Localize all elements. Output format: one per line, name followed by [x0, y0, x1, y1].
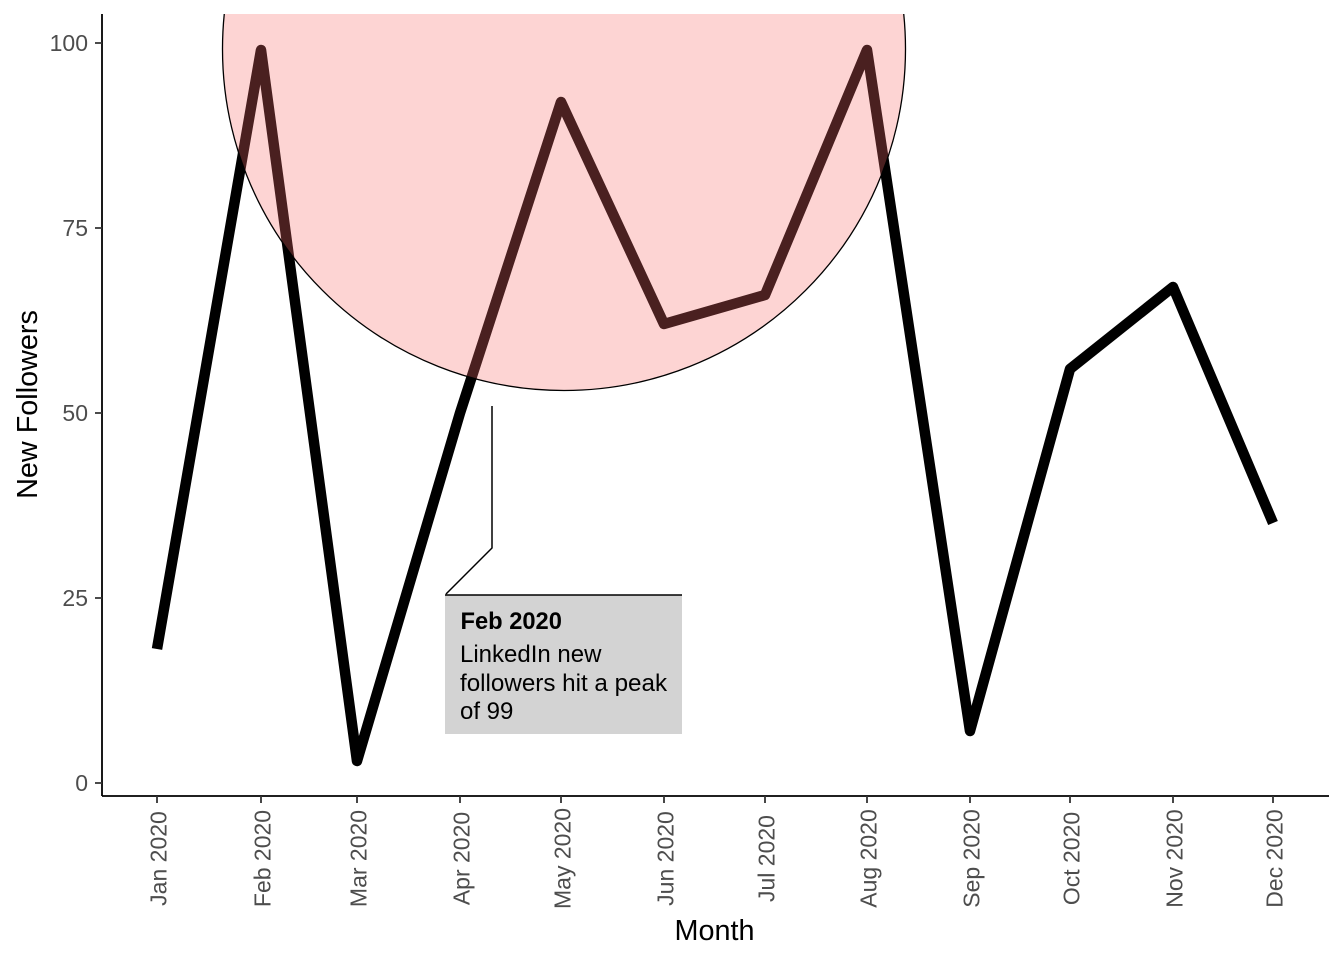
x axis: Jul 2020 — [754, 815, 780, 902]
x axis: Mar 2020 — [346, 810, 372, 907]
x axis: Dec 2020 — [1262, 809, 1288, 908]
callout: Feb 2020 peak: Feb 2020 — [460, 609, 562, 635]
y axis: 75 — [62, 215, 88, 241]
y axis: 50 — [62, 400, 88, 426]
y axis — [50, 14, 102, 796]
callout: Feb 2020 peak: followers hit a peak — [460, 670, 668, 697]
x axis: Nov 2020 — [1162, 809, 1188, 908]
x axis: Feb 2020 — [250, 810, 276, 907]
callout: Feb 2020 peak: LinkedIn new — [460, 641, 602, 668]
y axis title: New Followers — [12, 310, 44, 499]
x axis: Apr 2020 — [448, 812, 474, 905]
x axis: Jan 2020 — [146, 811, 172, 906]
x axis: Jun 2020 — [652, 811, 678, 906]
data line — [157, 50, 1273, 761]
x axis: Sep 2020 — [958, 809, 984, 908]
x axis — [102, 796, 1329, 909]
x axis: Oct 2020 — [1058, 812, 1084, 905]
highlight circle annotation — [222, 14, 906, 392]
callout: Feb 2020 peak: of 99 — [460, 698, 513, 725]
y axis: 25 — [62, 585, 88, 611]
callout connector — [446, 406, 492, 594]
y axis: 0 — [75, 770, 88, 796]
y axis: 100 — [50, 30, 88, 56]
x axis: Aug 2020 — [856, 809, 882, 908]
x axis title: Month — [674, 915, 755, 947]
callout: Feb 2020 peak — [445, 595, 682, 734]
x axis: May 2020 — [550, 808, 576, 909]
